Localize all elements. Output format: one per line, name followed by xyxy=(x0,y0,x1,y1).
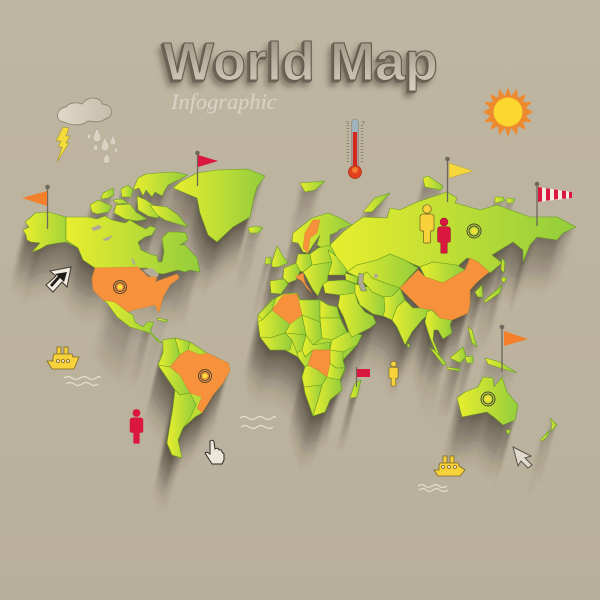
waves: left xyxy=(64,376,100,386)
china base xyxy=(400,258,489,320)
aral sea xyxy=(374,274,378,278)
icon: black arrow cursor xyxy=(46,267,71,292)
icon: light arrow cursor xyxy=(513,447,532,468)
sri lanka xyxy=(407,343,410,348)
canadian arctic islands xyxy=(90,172,188,227)
icon: raindrops xyxy=(87,128,118,164)
mongolia xyxy=(420,262,465,283)
icon: thermometer: °F xyxy=(361,120,366,125)
icon: ship left xyxy=(47,347,79,369)
new zealand xyxy=(540,430,550,441)
title: World Map xyxy=(163,32,438,92)
flag: orange australia xyxy=(500,325,528,372)
target: australia xyxy=(481,392,495,406)
south america xyxy=(158,338,230,458)
map targets xyxy=(114,224,495,406)
target: usa xyxy=(114,280,126,294)
icon: cloud xyxy=(57,98,111,125)
icon: sun xyxy=(483,87,533,137)
scandinavia xyxy=(292,213,352,253)
tasmania xyxy=(506,430,511,435)
japan xyxy=(483,285,502,302)
subtitle: Infographic xyxy=(170,89,277,114)
madagascar xyxy=(350,380,361,398)
russia xyxy=(330,192,576,273)
congo xyxy=(308,350,330,377)
canadian lakes xyxy=(91,225,136,265)
land masses xyxy=(23,169,576,458)
target: brazil xyxy=(198,370,212,382)
philippines xyxy=(468,327,477,347)
java xyxy=(447,367,460,371)
world map xyxy=(9,151,576,513)
middle east and central asia xyxy=(323,254,418,337)
italy xyxy=(295,273,312,293)
flag: red greenland xyxy=(195,151,218,186)
person: red xyxy=(438,218,450,253)
south america countries xyxy=(158,338,196,458)
sumatra xyxy=(430,348,447,365)
caspian sea xyxy=(358,273,367,291)
australia xyxy=(457,377,518,425)
waves: middle xyxy=(240,416,275,428)
hokkaido xyxy=(502,277,507,282)
canada xyxy=(66,216,200,274)
borneo xyxy=(450,347,466,363)
great lakes xyxy=(143,268,159,281)
highlighted countries xyxy=(92,220,489,413)
icon: lightning xyxy=(56,127,70,162)
russian arctic islands xyxy=(300,176,515,212)
sweden xyxy=(303,220,320,253)
india xyxy=(392,300,432,345)
europe countries xyxy=(270,245,347,296)
china xyxy=(400,258,489,320)
waves: right xyxy=(418,484,448,492)
icon: ship right xyxy=(434,456,465,476)
person: small yellow xyxy=(389,361,398,386)
korea xyxy=(475,285,483,297)
algeria xyxy=(272,294,302,324)
brazil xyxy=(170,350,230,413)
alaska xyxy=(23,212,78,252)
greenland xyxy=(173,169,265,242)
person: large yellow xyxy=(420,205,434,243)
target: russia xyxy=(467,224,481,238)
united kingdom xyxy=(272,246,288,267)
icon: hand cursor xyxy=(205,440,224,464)
caribbean islands xyxy=(157,318,168,322)
africa xyxy=(258,293,362,416)
flag: red madagascar xyxy=(356,367,370,387)
new guinea xyxy=(485,358,517,373)
ireland xyxy=(265,257,271,264)
sulawesi xyxy=(465,356,473,363)
icon: thermometer: °C xyxy=(345,120,350,125)
windsock xyxy=(535,182,572,226)
usa xyxy=(92,267,179,313)
sakhalin xyxy=(501,258,505,273)
person: red south pacific xyxy=(130,409,143,444)
flag: yellow russia xyxy=(445,157,473,202)
africa countries xyxy=(258,293,362,416)
flag: orange alaska xyxy=(22,185,50,229)
indochina xyxy=(425,310,452,356)
long land shadow xyxy=(9,172,575,513)
icon: thermometer xyxy=(345,119,366,178)
mexico and central america xyxy=(103,300,162,343)
iceland xyxy=(248,226,263,233)
